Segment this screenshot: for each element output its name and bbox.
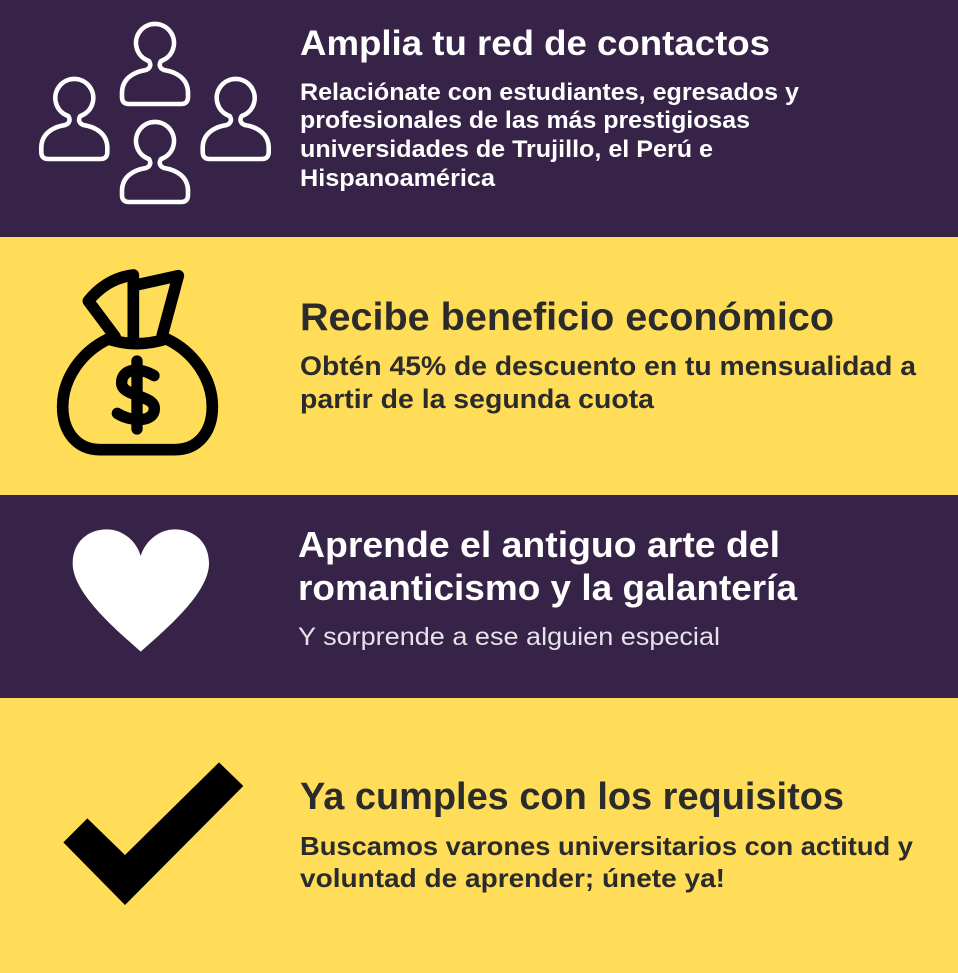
panel: requisitos	[0, 698, 958, 973]
heading: ya cumples con los requisitos: Ya cumples con los requisitos	[300, 776, 844, 818]
panel: red de contactos	[0, 0, 958, 237]
text block: requisitos description: Buscamos varones universitarios con actitud y	[300, 831, 914, 861]
text: sorprende a ese alguien especial: Y sorprende a ese alguien especial	[298, 623, 720, 651]
text block: requisitos description: voluntad de aprender; únete ya!	[300, 863, 725, 893]
text block: red de contactos description: Hispanoamérica	[300, 165, 496, 192]
panel: beneficio económico	[0, 237, 958, 495]
text block: descuento	[300, 351, 917, 414]
text block: red de contactos description: universidades de Trujillo, el Perú e	[300, 136, 713, 163]
text block: requisitos description	[300, 831, 914, 893]
heading: aprende el antiguo arte	[298, 524, 798, 608]
text block: descuento: partir de la segunda cuota	[300, 384, 655, 414]
heading: recibe beneficio económico: Recibe beneficio económico	[300, 296, 834, 339]
heading: aprende el antiguo arte: romanticismo y la galantería	[298, 567, 798, 608]
icon: group of people	[41, 24, 269, 202]
icon: check mark	[63, 762, 243, 905]
text block: red de contactos description: Relaciónate con estudiantes, egresados y	[300, 79, 800, 106]
heading: aprende el antiguo arte: Aprende el antiguo arte del	[298, 524, 780, 565]
text block: red de contactos description: profesionales de las más prestigiosas	[300, 107, 750, 134]
icon: money bag	[63, 275, 212, 450]
icon: heart	[73, 529, 209, 652]
text block: red de contactos description	[300, 79, 800, 192]
panel: romanticismo y galantería	[0, 495, 958, 698]
heading: amplia tu red de contactos: Amplia tu red de contactos	[300, 24, 770, 63]
text block: descuento: Obtén 45% de descuento en tu mensualidad a	[300, 351, 917, 381]
